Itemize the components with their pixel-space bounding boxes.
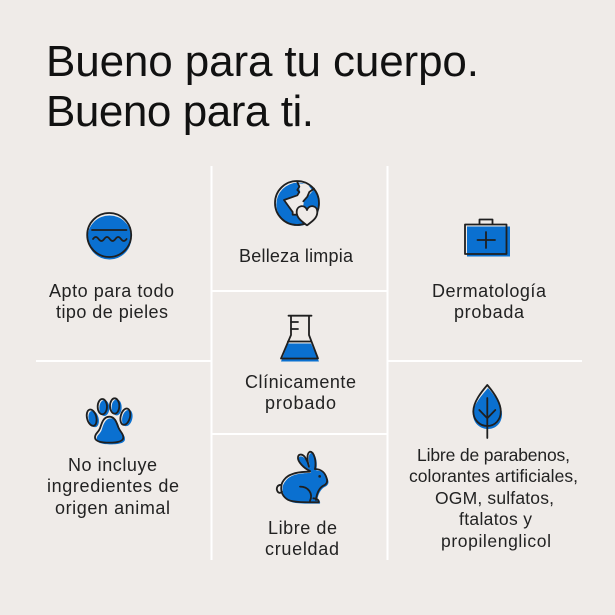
icon: leaf: [473, 385, 502, 438]
panel: all skin types: [49, 213, 174, 322]
label: No incluye: [68, 455, 157, 475]
label: Belleza limpia: [239, 246, 354, 266]
label: ingredientes de: [47, 476, 179, 496]
label: tipo de pieles: [56, 302, 168, 322]
icon: paw: [85, 398, 134, 444]
label: [47, 455, 179, 518]
title: Bueno para ti.: [46, 87, 314, 136]
label: OGM, sulfatos,: [435, 488, 554, 508]
label: origen animal: [55, 498, 170, 518]
label: propilenglicol: [441, 531, 551, 551]
panel: dermatology tested: [432, 220, 547, 322]
label: [245, 372, 356, 413]
icon: rabbit: [277, 452, 329, 504]
label: Clínicamente: [245, 372, 356, 392]
icon: flask: [281, 316, 319, 362]
label: [409, 445, 578, 551]
panel: cruelty free: [265, 452, 339, 559]
title: [46, 37, 479, 136]
label: [432, 281, 547, 322]
icon: globe with heart: [275, 181, 320, 226]
panel: free from parabens: [409, 385, 578, 551]
label: Dermatología: [432, 281, 547, 301]
panel: no animal ingredients: [47, 398, 179, 518]
label: crueldad: [265, 539, 339, 559]
label: ftalatos y: [459, 509, 532, 529]
icon: water circle: [87, 213, 132, 260]
label: probado: [265, 393, 336, 413]
label: Libre de parabenos,: [417, 445, 570, 465]
title: Bueno para tu cuerpo.: [46, 37, 479, 86]
panel: clean beauty: [239, 181, 354, 266]
label: colorantes artificiales,: [409, 466, 578, 486]
label: [265, 518, 339, 559]
label: Libre de: [268, 518, 337, 538]
label: probada: [454, 302, 525, 322]
icon: medical case: [465, 220, 510, 256]
panel: clinically tested: [245, 316, 356, 413]
label: [49, 281, 174, 322]
label: Apto para todo: [49, 281, 174, 301]
